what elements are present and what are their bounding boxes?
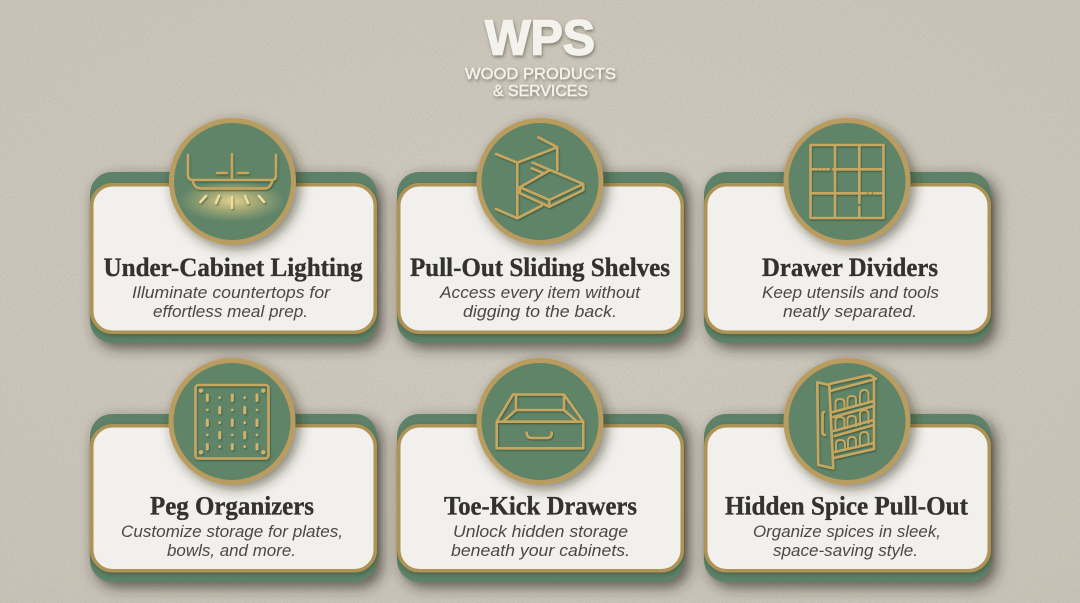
card back <box>704 172 991 343</box>
heading: Drawer Dividers <box>762 253 938 282</box>
panel: peg organizers <box>90 360 377 582</box>
icon: light fixture <box>178 154 286 222</box>
description <box>762 284 939 321</box>
icon badge <box>479 360 601 482</box>
icon badge <box>171 360 293 482</box>
logo mark: WPS <box>485 12 595 66</box>
panel: drawer dividers <box>704 120 991 343</box>
card face <box>92 185 375 332</box>
heading: Pull-Out Sliding Shelves <box>410 253 670 282</box>
description: bowls, and more. <box>167 542 296 560</box>
panel: under-cabinet lighting <box>90 120 377 343</box>
icon: open drawer <box>497 394 583 448</box>
card back <box>704 414 991 582</box>
description: digging to the back. <box>463 303 617 321</box>
icon: divider grid <box>810 145 884 218</box>
description <box>439 284 641 321</box>
icon: pegboard <box>196 385 268 458</box>
icon: spice rack <box>817 375 876 468</box>
card back <box>90 172 377 343</box>
description: effortless meal prep. <box>153 303 308 321</box>
icon badge <box>786 360 908 482</box>
heading: Peg Organizers <box>150 492 314 520</box>
card face <box>92 426 375 571</box>
card back <box>397 414 684 582</box>
panel: pull-out sliding shelves <box>397 120 684 343</box>
icon badge <box>172 120 294 242</box>
icon badge <box>479 120 601 242</box>
card face <box>706 185 989 332</box>
description: neatly separated. <box>783 303 917 321</box>
card back <box>397 172 684 343</box>
card back <box>90 414 377 582</box>
card face <box>399 185 682 332</box>
logo name second line: & SERVICES <box>493 83 588 100</box>
heading: Under-Cabinet Lighting <box>104 253 362 282</box>
icon badge <box>786 120 908 242</box>
description: Customize storage for plates, <box>121 523 343 541</box>
description: space-saving style. <box>773 542 918 560</box>
card face <box>706 426 989 571</box>
description: beneath your cabinets. <box>451 542 630 560</box>
description <box>451 523 630 560</box>
heading: Hidden Spice Pull-Out <box>725 492 968 520</box>
description <box>753 523 941 560</box>
panel: hidden spice pull-out <box>704 360 991 582</box>
logo name: WOOD PRODUCTS <box>465 66 616 83</box>
heading: Toe-Kick Drawers <box>444 492 637 520</box>
description: Illuminate countertops for <box>132 284 332 302</box>
description: Access every item without <box>439 284 641 302</box>
description: Keep utensils and tools <box>762 284 939 302</box>
description <box>132 284 332 321</box>
description: Organize spices in sleek, <box>753 523 941 541</box>
icon: sliding shelf <box>496 137 583 218</box>
logo: WPS wordmark <box>465 12 616 100</box>
description <box>121 523 343 560</box>
card face <box>399 426 682 571</box>
panel: toe-kick drawers <box>397 360 684 582</box>
description: Unlock hidden storage <box>453 523 628 541</box>
